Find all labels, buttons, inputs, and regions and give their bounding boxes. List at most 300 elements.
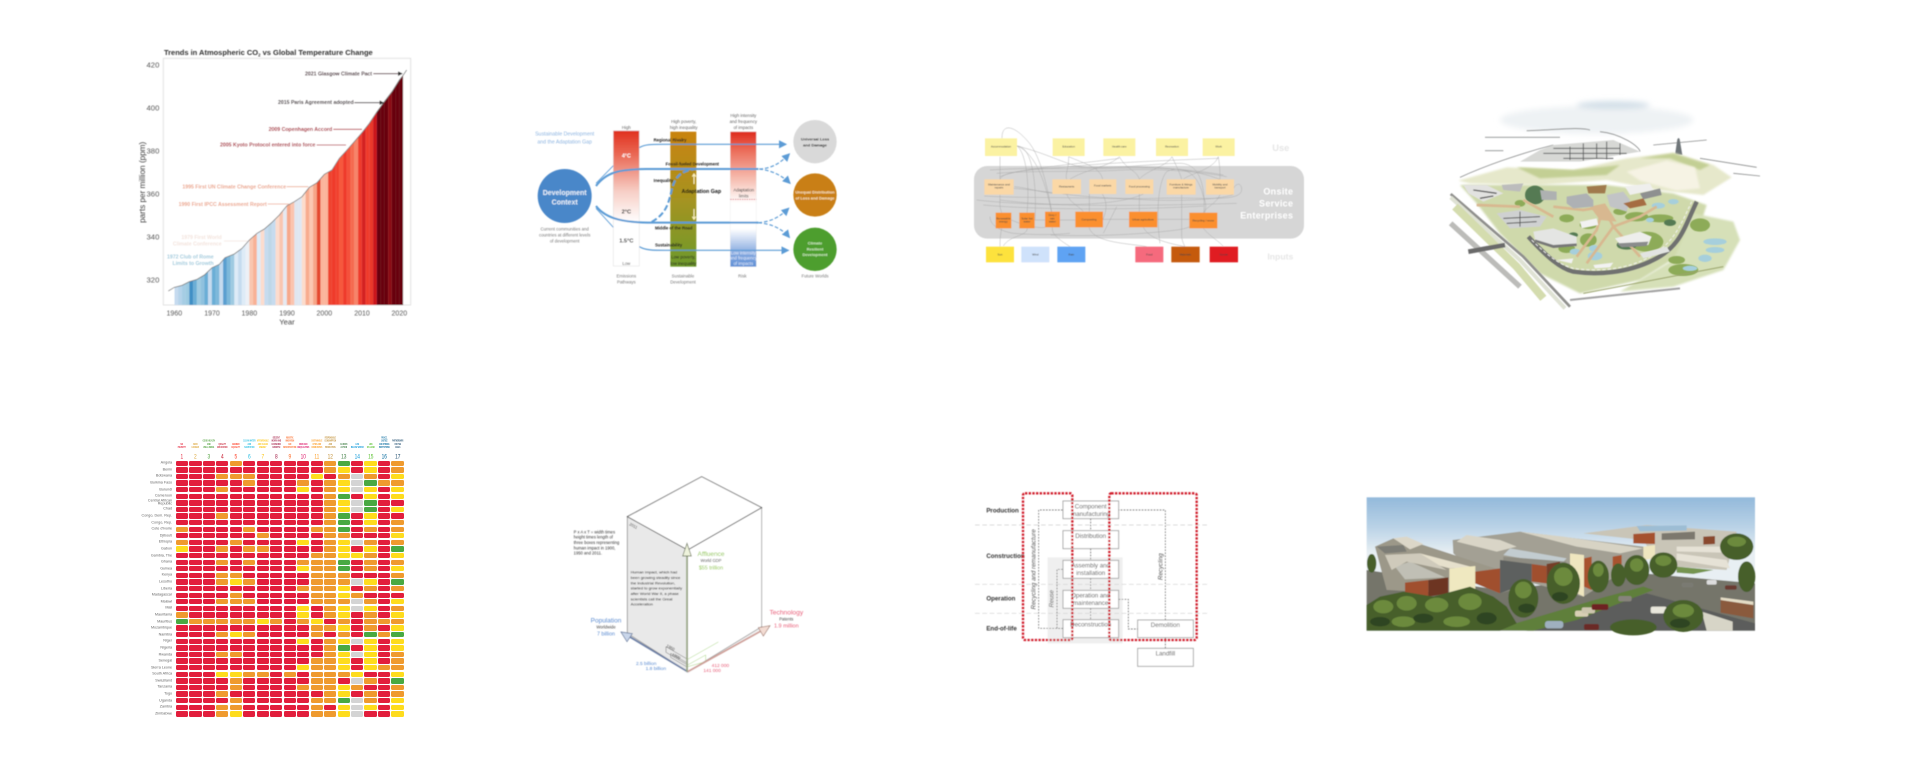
goal titles: PEACE, — [381, 436, 387, 440]
y axis labels: 320 — [147, 275, 159, 284]
text: Nigeria — [160, 645, 172, 649]
goal titles: CONSUMPTION — [325, 439, 336, 443]
sky wash — [1500, 101, 1693, 134]
label: population: 7 billion — [597, 632, 615, 638]
service box labels: transport — [1214, 186, 1226, 190]
goal titles: JUSTICE — [381, 439, 388, 443]
annotation: 2009 Copenhagen: 2009 Copenhagen Accord — [269, 127, 332, 133]
human impact note: been growing steadily since — [631, 575, 681, 580]
buildings — [1463, 183, 1670, 268]
bar: emissions pathways: 1.5°C — [619, 238, 633, 244]
far building block — [1583, 525, 1737, 570]
service box labels: Restaurants — [1059, 184, 1075, 188]
goal titles: ON LAND — [367, 446, 375, 449]
utility box labels: Solar hot — [1021, 216, 1033, 220]
arrow: technology — [688, 626, 770, 672]
goal titles: AND — [207, 442, 211, 446]
panel: campus rendering photo — [1367, 497, 1755, 635]
goal numbers: 16 — [382, 454, 387, 461]
y axis labels: 380 — [147, 147, 159, 156]
bar: emissions pathways: 4°C — [622, 153, 631, 159]
stage labels: Operation — [986, 596, 1016, 603]
process box labels: Assembly and — [1071, 563, 1111, 570]
text: Ethiopia — [159, 540, 172, 544]
text: Lesotho — [159, 579, 172, 583]
input box labels: Food — [1146, 252, 1153, 256]
human impact note: Acceleration — [631, 601, 653, 606]
column captions: Development — [670, 280, 697, 285]
panel: SDG dashboard heatmap grid — [142, 461, 404, 717]
use box labels: Education — [1062, 145, 1075, 149]
circle: climate resilient: Climate — [808, 241, 823, 246]
goal titles: WORK AND — [272, 439, 281, 443]
stage labels: End-of-life — [986, 625, 1017, 632]
tree masses — [1367, 533, 1755, 635]
text: Mozambique — [151, 625, 172, 629]
goal numbers: 7 — [261, 454, 264, 461]
goal titles: EDUCATION — [217, 446, 227, 449]
goal titles: AND — [247, 442, 251, 446]
annotation: 2009 Copenhagen — [269, 127, 362, 133]
goal numbers: 15 — [368, 454, 373, 461]
panel: SDG heatmap column headings — [178, 436, 404, 461]
input boxes — [986, 247, 1238, 262]
shaded foliage — [1370, 592, 1690, 628]
panel: development context and adaptation gap — [535, 113, 837, 285]
bar: emissions pathways: 2°C — [622, 210, 631, 216]
goal titles: PARTNERSHIPS — [392, 439, 404, 443]
base values: 2.5 billion — [636, 661, 657, 667]
text: Benin — [163, 467, 172, 471]
goal titles: LIFE — [369, 442, 373, 446]
input box labels: Wind — [1032, 252, 1039, 256]
utility box labels: Urban agriculture — [1132, 217, 1154, 221]
base values: 141 000 — [703, 668, 721, 674]
service box labels: Food markets — [1094, 184, 1112, 188]
input box labels: Goods — [1219, 252, 1228, 256]
goal titles: NO — [181, 442, 183, 446]
dark planting — [1525, 186, 1676, 250]
x axis labels — [167, 311, 407, 318]
right face — [688, 508, 762, 672]
text: Congo, Dem. Rep. — [142, 513, 172, 517]
goal titles: CLEAN WATER — [243, 439, 256, 443]
adaptation gap label and arrows: Adaptation Gap — [681, 189, 722, 195]
annotation: 1979: 1979 First World — [181, 235, 222, 241]
utility box labels: energy — [999, 220, 1008, 224]
goal titles: CLIMATE — [340, 442, 348, 446]
service box labels: Furniture & fittings — [1170, 182, 1193, 186]
text: Botswana — [156, 474, 172, 478]
front building wing — [1375, 538, 1500, 593]
caption: current communities: of development — [550, 238, 580, 243]
y axis labels: 400 — [147, 103, 159, 112]
y axis labels: 420 — [147, 61, 159, 70]
goal titles: AND STRONG — [379, 442, 390, 446]
goal titles: GOOD HEALTH — [203, 439, 215, 443]
base values — [636, 661, 729, 674]
circle: universal loss: Universal Loss — [801, 137, 830, 142]
ground — [1367, 570, 1755, 631]
goal titles: INSTITUTIONS — [379, 445, 390, 449]
text: Zimbabwe — [155, 711, 172, 715]
red dotted boundary: right — [1109, 493, 1197, 640]
sunlit foliage — [1373, 537, 1746, 627]
pathway labels — [654, 138, 720, 248]
x axis labels: 1980 — [242, 311, 257, 318]
bar: emissions pathways — [613, 125, 639, 266]
rotated label: reuse: Reuse — [1050, 589, 1056, 607]
plot frame — [163, 58, 411, 305]
annotation: 1972 — [167, 255, 214, 267]
input box labels: Rain — [1068, 252, 1075, 256]
annotation: 1979 — [173, 235, 247, 247]
goal titles: HUNGER — [192, 446, 199, 449]
bar: risk: Adaptation — [733, 188, 755, 193]
use row label: Use — [1272, 143, 1289, 153]
text: Gambia, The — [151, 553, 172, 557]
x axis title: Year — [279, 317, 295, 326]
input box labels: Materials — [1180, 252, 1192, 256]
goal titles: ZERO — [193, 442, 198, 446]
soft shadow — [628, 627, 763, 673]
enterprises heading: Enterprises — [1240, 210, 1293, 220]
panel: human impact cube — [574, 477, 804, 674]
caption: current communities: countries at different levels — [539, 232, 590, 237]
goal numbers: 12 — [328, 454, 333, 461]
text: Cameroon — [155, 494, 172, 498]
goal titles: FOR THE — [395, 442, 401, 446]
use box labels: Health care — [1112, 145, 1127, 149]
goal titles: PRODUCTION — [325, 445, 336, 449]
utility box labels: water — [1024, 220, 1031, 224]
utility box labels — [996, 213, 1215, 224]
goal numbers: 8 — [275, 454, 278, 461]
highway — [1451, 194, 1723, 308]
use box labels: Recreation — [1165, 145, 1179, 149]
small boxes 1900 and 1950: 1900 — [671, 652, 682, 661]
bar: risk: Low intensity — [731, 250, 757, 255]
chart title: Trends in Atmospheric CO — [164, 48, 258, 57]
text: Gabon — [161, 546, 172, 550]
service boxes — [984, 179, 1234, 195]
text: Republic — [158, 502, 172, 506]
text: Burundi — [159, 487, 172, 491]
use box labels: Work — [1215, 145, 1223, 149]
text: Central African — [148, 498, 172, 502]
arrow: affluence — [683, 543, 691, 672]
goal numbers: 1 — [180, 454, 183, 461]
column captions: Future Worlds — [801, 274, 829, 279]
hill planting — [1517, 153, 1710, 178]
service box labels: repairs — [995, 186, 1004, 190]
service box labels: Food processing — [1129, 184, 1150, 188]
goal titles: GROWTH — [272, 446, 280, 449]
input box labels: Sun — [997, 252, 1003, 256]
y axis labels — [147, 61, 159, 284]
pathway labels: Middle of the Road — [655, 226, 693, 231]
annotation: 1990: 1990 First IPCC Assessment Report — [179, 202, 267, 208]
goal numbers: 10 — [301, 454, 306, 461]
goal numbers: 6 — [248, 454, 251, 461]
x axis labels: 2000 — [317, 311, 332, 318]
photo contents — [1367, 497, 1755, 635]
text: South Africa — [152, 672, 172, 676]
utility box labels: Recycling / reuse — [1192, 218, 1215, 222]
goal numbers: 11 — [314, 454, 319, 461]
text: Guinea — [160, 566, 172, 570]
text: Namibia — [159, 632, 172, 636]
circle: universal loss: and Damage — [803, 143, 828, 148]
bar: risk: and frequency — [730, 119, 758, 124]
circle: unequal distribution: of Loss and Damage — [796, 195, 835, 200]
process box labels — [1070, 503, 1180, 658]
goal titles: DECENT — [273, 436, 280, 440]
use box labels — [991, 145, 1223, 149]
goal titles: AND CLEAN — [258, 442, 268, 446]
x axis labels: 1970 — [204, 311, 220, 318]
text: Tanzania — [157, 685, 172, 689]
tan plaza — [1590, 203, 1617, 222]
goal titles: INDUSTRY, — [286, 436, 294, 440]
human impact note: after World War II, a phase — [631, 591, 680, 596]
label: affluence: World GDP — [701, 558, 722, 563]
goal titles: ACTION — [341, 446, 347, 449]
label: population: Population — [591, 617, 622, 624]
circle: climate resilient: Development — [802, 252, 828, 257]
stage labels — [986, 508, 1025, 632]
small kiosk buildings — [1721, 598, 1753, 618]
process box labels: installation — [1076, 570, 1106, 577]
pathways: blue arrows — [596, 144, 790, 250]
service box labels: manufacture — [1173, 186, 1189, 190]
human impact note: the Industrial Revolution, — [631, 580, 675, 585]
flow arrows — [1039, 510, 1165, 648]
panel: aerial campus sketch — [1451, 101, 1760, 308]
use boxes — [985, 138, 1235, 156]
goal numbers: 9 — [288, 454, 291, 461]
bar: sustainable development: low inequality — [670, 261, 697, 266]
annotation: 1995: 1995 First UN Climate Change Conference — [182, 184, 286, 190]
goal titles: QUALITY — [219, 442, 226, 446]
caption: current communities: Current communities and — [540, 226, 589, 231]
service box labels: Maintenance and — [988, 182, 1010, 186]
lawn strip — [1493, 587, 1653, 631]
goal titles: GOALS — [395, 445, 401, 449]
human impact note: Human impact, which had — [631, 569, 677, 574]
circle: unequal distribution: Unequal Distribution — [795, 190, 835, 195]
chart title: 2 — [258, 53, 261, 58]
text: Burkina Faso — [150, 480, 172, 484]
column captions: Sustainable — [672, 274, 695, 279]
goal titles: SUSTAINABLE — [311, 439, 322, 443]
parked road surface — [1527, 593, 1755, 631]
goal numbers: 13 — [341, 454, 346, 461]
goal numbers: 17 — [395, 454, 400, 461]
CO2 concentration line — [168, 70, 407, 291]
goal titles: POVERTY — [178, 446, 186, 449]
x axis labels: 1990 — [279, 311, 295, 318]
goal titles: AND — [329, 442, 332, 446]
parking strips — [1532, 202, 1692, 270]
hills — [1458, 153, 1732, 195]
column captions: Pathways — [617, 280, 636, 285]
small boxes 1900 and 1950 — [666, 642, 718, 667]
year label 2011: 2011 — [629, 521, 639, 530]
goal titles: ECONOMIC — [272, 442, 281, 446]
utility box labels: Renewable — [996, 216, 1011, 220]
annotation: 2021 Glasgow — [305, 71, 402, 77]
text: Djibouti — [160, 533, 172, 537]
goal numbers: 2 — [194, 454, 197, 461]
label: affluence: Affluence — [698, 551, 725, 558]
label: affluence: $55 trillion — [699, 566, 723, 572]
base values: 412 000 — [712, 663, 729, 669]
annotation: 2021 Glasgow: 2021 Glasgow Climate Pact — [305, 71, 372, 77]
goal titles: AFFORDABLE — [257, 439, 269, 443]
bar: sustainable development: High poverty, — [671, 119, 696, 124]
tower — [1675, 138, 1682, 155]
utility box labels: rain — [1050, 216, 1055, 220]
column captions: Emissions — [616, 274, 636, 279]
label: technology: 1.9 million — [774, 624, 799, 630]
goal titles: CITIES AND — [312, 442, 321, 446]
cars — [1545, 580, 1737, 630]
annotation: 1972: 1972 Club of Rome — [167, 255, 214, 261]
label: population: Worldwide — [596, 624, 616, 629]
text: Congo, Rep. — [151, 520, 172, 524]
text: Malawi — [161, 599, 172, 603]
service box labels — [988, 182, 1228, 190]
left face — [627, 517, 688, 672]
circle: climate resilient — [793, 228, 837, 271]
enterprises background band — [974, 166, 1304, 239]
text: Niger — [163, 639, 172, 643]
chart title: vs Global Temperature Change — [261, 48, 373, 57]
panel: CO2 vs temperature chart — [138, 48, 411, 326]
rotated label: recycling: Recycling — [1157, 553, 1164, 580]
goal titles: LIFE — [355, 442, 359, 446]
goal titles: SANITATION — [244, 446, 255, 449]
x axis labels: 2010 — [354, 311, 370, 318]
circle: universal loss — [793, 120, 837, 163]
y axis labels: 360 — [147, 190, 159, 199]
enterprises heading: Onsite — [1263, 186, 1293, 196]
text: Mauritius — [157, 619, 172, 623]
process box labels: maintenance — [1073, 600, 1109, 607]
bar: sustainable development: high inequality — [670, 125, 698, 130]
text: Mali — [165, 606, 172, 610]
green patches — [1515, 200, 1710, 276]
warming stripes under the CO2 curve — [174, 63, 403, 305]
sky — [1367, 497, 1755, 631]
inputs row label: Inputs — [1267, 252, 1294, 262]
reuse shaded region — [1048, 557, 1123, 643]
goal titles: REDUCED — [299, 442, 308, 446]
panel: building lifecycle flow diagram — [975, 493, 1208, 666]
equation note: three boxes representing — [574, 540, 620, 545]
ponds — [1570, 199, 1727, 271]
pathway labels: Fossil-fueled Development — [666, 162, 720, 167]
stage labels: Construction — [986, 553, 1025, 560]
site ring road — [1528, 202, 1697, 273]
use box labels: Accommodation — [991, 145, 1012, 149]
tan paths — [1477, 200, 1657, 263]
annotation: 2015 Paris: 2015 Paris Agreement adopted — [278, 100, 354, 106]
bar: risk — [730, 113, 758, 267]
text: Senegal — [159, 658, 172, 662]
stage labels: Production — [986, 508, 1019, 515]
goal titles: EQUALITY — [231, 446, 240, 449]
circle: climate resilient: Resilient — [807, 246, 824, 251]
enterprises heading: Service — [1259, 198, 1293, 208]
text: Zambia — [160, 704, 172, 708]
label: technology: Patents — [779, 617, 793, 622]
text: Liberia — [161, 586, 172, 590]
goal titles: INEQUALITIES — [297, 446, 309, 449]
x axis labels: 1960 — [167, 311, 182, 318]
right wetland green — [1620, 213, 1740, 292]
circle: development context: Context — [552, 200, 578, 207]
annotation: 2005 Kyoto: 2005 Kyoto Protocol entered into force — [220, 143, 316, 149]
equation note: P x A x T = width times — [574, 529, 615, 534]
x axis labels: 2020 — [392, 311, 407, 318]
goal titles: GENDER — [232, 442, 240, 446]
process box labels: Operation and — [1071, 592, 1111, 599]
bar: emissions pathways: High — [622, 125, 631, 130]
text: Madagascar — [152, 592, 172, 596]
text: Rwanda — [159, 652, 172, 656]
text: Angola — [161, 461, 172, 465]
text: Ghana — [161, 559, 172, 563]
goal titles: BELOW WATER — [351, 446, 364, 449]
text: Chad — [163, 507, 172, 511]
bar: sustainable development — [670, 119, 698, 267]
adaptation gap label and arrows — [681, 174, 722, 219]
middle building wing — [1453, 532, 1647, 597]
goal titles: COMMUNITIES — [311, 445, 323, 449]
human impact note: started to grow exponentially — [631, 586, 683, 591]
small boxes 1900 and 1950: 1950 — [666, 643, 676, 652]
label: technology: Technology — [769, 610, 804, 617]
text: Sierra Leone — [151, 665, 172, 669]
pale hill highlight — [1627, 161, 1700, 191]
pathway labels: Sustainability — [655, 243, 683, 248]
base values: 1.8 billion — [646, 666, 666, 672]
goal titles: INNOVATION — [285, 439, 294, 443]
text: Uganda — [159, 698, 172, 702]
goal numbers: 4 — [221, 454, 224, 461]
rotated label: recycling and remanufacture: Recycling and remanufacture — [1031, 529, 1038, 609]
circle: unequal distribution — [793, 173, 837, 217]
utility box labels: Composting — [1081, 217, 1097, 221]
goal numbers — [180, 454, 400, 461]
goal titles — [178, 436, 404, 449]
bar: risk: limits — [739, 193, 749, 198]
subtitle: and the Adaptation Gap — [537, 139, 592, 145]
circle: development context — [538, 169, 592, 223]
red dotted boundary: left — [1023, 493, 1072, 640]
service box labels: Mobility and — [1212, 182, 1228, 186]
circle: development context: Development — [543, 190, 587, 197]
process box labels: Demolition — [1151, 622, 1180, 629]
main green site — [1460, 185, 1707, 293]
bar: risk: and frequency — [730, 256, 758, 261]
annotation: 1972: Limits to Growth — [172, 261, 214, 267]
input box labels — [997, 252, 1228, 256]
y axis title: parts per million (ppm) — [138, 141, 147, 223]
equation note: human impact in 1900, — [574, 545, 615, 550]
